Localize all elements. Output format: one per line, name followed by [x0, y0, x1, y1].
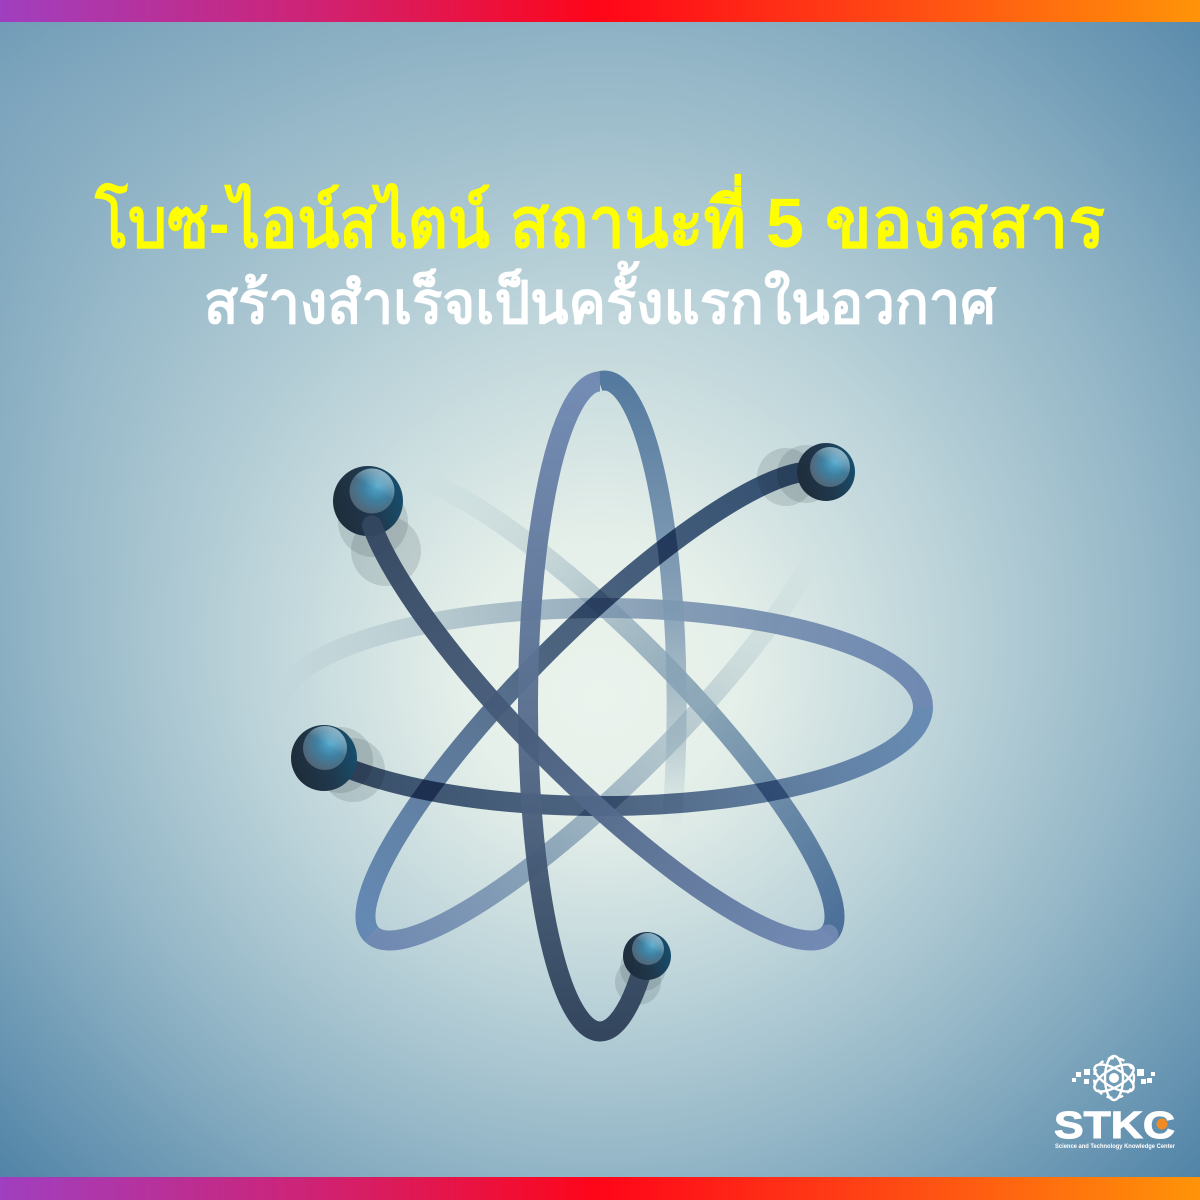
title: [94, 173, 1105, 262]
orbit: rising diagonal arm with tail: [318, 425, 828, 934]
atom illustration: [279, 381, 923, 1031]
title: โบซ-ไอน์สไตน์: [94, 182, 491, 262]
STKC logo: [1054, 1056, 1176, 1150]
orbit: horizontal lower arm with tail: [323, 707, 923, 806]
logo pixels: [1072, 1069, 1155, 1084]
orbit: falling diagonal arm with tail: [343, 502, 828, 987]
title: 5: [766, 184, 804, 262]
logo tagline: Science and Technology Knowledge Center: [1055, 1144, 1176, 1150]
orbit: rising diagonal faded arm: [372, 522, 837, 987]
orbit: falling diagonal faded arm: [396, 449, 881, 934]
electron: bottom: [623, 932, 671, 980]
electron: top-left: [333, 466, 403, 536]
orbit: vertical left arm with tail: [528, 382, 646, 1032]
logo wordmark: STKC: [1054, 1105, 1175, 1147]
orbit: horizontal upper arm: [279, 608, 923, 707]
electron: right: [797, 443, 855, 501]
title: ของสสาร: [825, 184, 1105, 262]
top rainbow bar: [0, 0, 1200, 22]
orbit: vertical right arm: [599, 381, 677, 832]
title: สถานะที่: [510, 173, 746, 262]
subtitle: สร้างสำเร็จเป็นครั้งแรกในอวกาศ: [204, 261, 997, 336]
logo orange dot: [1156, 1118, 1168, 1130]
electron shadows: [307, 445, 835, 1005]
bottom rainbow bar: [0, 1177, 1200, 1200]
electron: left: [291, 725, 357, 791]
logo icon: atom: [1090, 1056, 1138, 1100]
